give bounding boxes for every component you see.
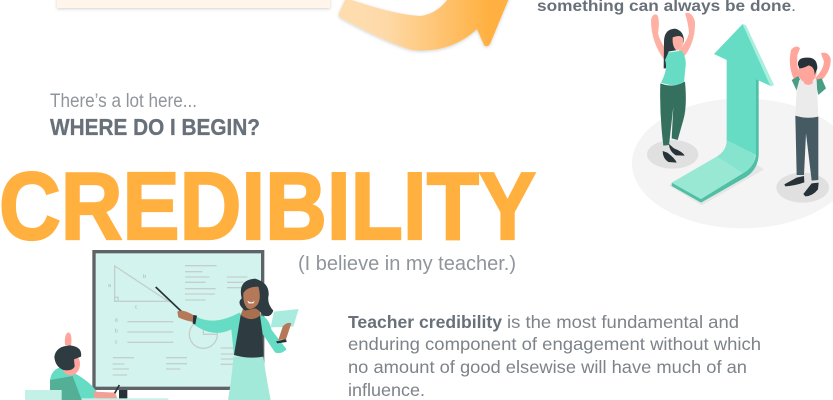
whiteboard letters: b (115, 328, 118, 334)
icon: big upward arrow (672, 24, 774, 203)
whiteboard diagrams and notes (113, 266, 247, 375)
text block: teacher credibility definition: enduring component of engagement without which (348, 334, 761, 354)
text block: teacher credibility definition: influence. (348, 380, 425, 400)
whiteboard letters: b (143, 274, 146, 280)
heading: credibility: CREDIBILITY (0, 153, 536, 260)
figure: teacher (177, 279, 299, 400)
pointer stick (156, 287, 182, 312)
desk item (119, 390, 127, 399)
illustration: people cheering beside upward arrow (632, 13, 833, 228)
whiteboard letters: c (115, 340, 118, 346)
whiteboard letters: a (108, 283, 112, 289)
whiteboard letters (108, 274, 146, 346)
text block: teacher credibility definition (348, 312, 761, 400)
whiteboard (94, 252, 263, 388)
floor ellipse (632, 98, 833, 228)
figure: man with raised arms (784, 47, 831, 196)
heading: where do I begin: WHERE DO I BEGIN? (50, 114, 260, 140)
arrow: orange swoosh (339, 0, 510, 51)
floor shadow under woman (647, 140, 698, 169)
whiteboard letters: c (135, 305, 138, 311)
figure: woman with raised arms (651, 13, 695, 163)
figure: student raising hand (25, 332, 168, 400)
text block: teacher credibility definition: Teacher credibility (348, 312, 502, 332)
floor shadow under man (776, 173, 829, 203)
text block: teacher credibility definition: no amount of good elsewise will have much of an (348, 357, 747, 377)
text block: teacher credibility definition: is the most fundamental and (507, 312, 739, 332)
illustration: teacher at whiteboard and student (25, 252, 299, 400)
subheading: I believe in my teacher: (I believe in my teacher.) (298, 253, 516, 275)
arrow floor shadow (668, 163, 764, 205)
panel: cream card bottom edge (57, 0, 330, 8)
text: intro line: There’s a lot here... (50, 90, 197, 112)
whiteboard letters: a (115, 318, 119, 324)
